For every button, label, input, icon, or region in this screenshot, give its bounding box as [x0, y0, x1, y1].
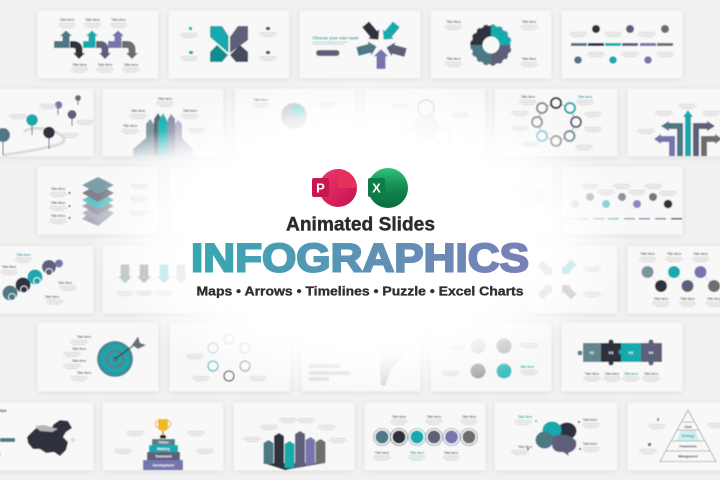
slide: downward arrows card	[103, 246, 223, 313]
slide: stacked layers: Title Here	[51, 201, 65, 205]
slide: swirl chain: Title Here	[45, 295, 59, 299]
slide: zigzag circles: Title Here	[640, 252, 655, 256]
slide: globe: Title Here	[254, 98, 268, 102]
slide: swirl chain: Title Here	[16, 253, 31, 257]
slide: brain: Title Here	[518, 415, 532, 419]
slide: zigzag circles: Title Here	[693, 252, 708, 256]
slide: target: Title Here	[77, 335, 91, 339]
slide: Asia map	[0, 403, 93, 470]
slide: brain: Title Here	[518, 445, 532, 449]
slide: trophy steps: Development	[153, 464, 175, 468]
slide: six circle row: Title Here	[375, 451, 389, 455]
slide: gear: Title Here	[522, 57, 536, 61]
slide: five rising arrows: Title Here	[183, 109, 197, 113]
slide: faint map	[432, 167, 552, 234]
faded converging arrows	[536, 258, 578, 301]
slide: branching arrows	[628, 89, 720, 156]
slide: six circle row: Title Here	[410, 451, 424, 455]
slide: arrow ribbon	[38, 11, 158, 78]
slide: stacked layers	[38, 167, 158, 234]
slide: pyramid: Framework	[679, 444, 697, 448]
slide: faint circle	[170, 167, 290, 234]
icon: PowerPoint logo	[312, 169, 357, 207]
slide: pyramid: Goal	[684, 425, 692, 429]
icon: Excel logo: X	[372, 180, 381, 196]
slide: target: Title Here	[72, 347, 86, 351]
slide: puzzle: Title Here	[644, 372, 658, 376]
slide: pyramid	[628, 403, 720, 470]
slide: six circle row: Title Here	[462, 415, 476, 419]
slide: brain	[495, 403, 617, 470]
slide: puzzle: Title Here	[605, 372, 619, 376]
slide: six circle row: Title Here	[392, 415, 406, 419]
slide: timeline	[562, 11, 682, 78]
slide: puzzle: Title Here	[624, 372, 638, 376]
slide: gear: Title Here	[446, 57, 461, 61]
slide: globe	[235, 89, 355, 156]
slide: ring of eight circles: Title Here	[521, 95, 535, 99]
slide: three circles	[365, 89, 485, 156]
slide: five rising arrows: Title Here	[123, 124, 137, 128]
slide: ring of eight circles: Title Here	[578, 95, 592, 99]
slide: trophy steps: Vision	[158, 440, 169, 444]
slide: six circle row	[365, 403, 485, 470]
slide: puzzle: Title Here	[585, 372, 599, 376]
slide: arrow columns	[234, 403, 354, 470]
slide: trophy steps: Teamwork	[155, 454, 172, 458]
slide: puzzle: 01	[590, 350, 595, 355]
slide: arrow ribbon: Title Here	[111, 18, 126, 22]
subtitle: categories: Maps • Arrows • Timelines • Puzzle • Excel Charts	[196, 284, 524, 298]
slide: arrow ribbon: Title Here	[85, 18, 100, 22]
slide: brain: Title Here	[583, 418, 597, 422]
slide: swirl chain: Title Here	[58, 281, 72, 285]
slide: puzzle: 02	[629, 350, 634, 355]
title: INFOGRAPHICS: INFOGRAPHICS	[191, 236, 529, 280]
slide: target: Title Here	[72, 359, 86, 363]
slide: brain: Title Here	[583, 442, 597, 446]
slide: gear: Title Here	[522, 20, 536, 24]
slide: four circles	[431, 323, 551, 391]
slide: pyramid: Strategy	[682, 434, 695, 438]
slide: arrow ribbon: Title Here	[60, 18, 74, 22]
slide: four circles: Title Here	[520, 365, 534, 369]
slide: seven step timeline	[562, 167, 682, 234]
slide: zigzag circles: Title Here	[680, 297, 695, 301]
slide: target	[38, 323, 158, 391]
slide: five rising arrows: Title Here	[158, 97, 172, 101]
slide: six circle row: Title Here	[427, 415, 441, 419]
slide: zigzag circles: Title Here	[667, 252, 681, 256]
faded downward arrows	[116, 265, 188, 296]
slide: circle cluster	[170, 323, 290, 391]
slide: six circle row: Title Here	[444, 451, 458, 455]
slide: stacked layers: Title Here	[51, 187, 65, 191]
slide: X shape	[169, 11, 289, 78]
slide: swirl chain: Title Here	[2, 265, 16, 269]
icon: PowerPoint logo: P	[316, 180, 325, 196]
slide: arrow ribbon: Title Here	[72, 63, 87, 67]
slide: five rising arrows	[103, 89, 223, 156]
slide: trophy steps: Mastery	[157, 447, 170, 451]
slide: choose your own team	[300, 11, 420, 78]
slide: puzzle: 03	[609, 350, 614, 355]
slide: puzzle: 04	[649, 350, 654, 355]
slide: stacked layers: Title Here	[51, 214, 65, 218]
slide: gear: Title Here	[446, 20, 461, 24]
slide: pyramid: Management	[678, 454, 699, 458]
slide: bars and map	[302, 323, 420, 391]
slide: choose your own team: Choose your own team	[312, 36, 359, 40]
slide: converging arrows card	[528, 246, 617, 313]
slide: arrow ribbon: Title Here	[98, 63, 112, 67]
icon: Excel logo	[368, 168, 408, 208]
slide: road pins	[0, 89, 94, 156]
slide: ring of eight circles	[495, 89, 617, 156]
heading: Animated Slides: Animated Slides	[286, 214, 435, 236]
slide: arrow ribbon: Title Here	[124, 63, 138, 67]
slide: puzzle	[562, 323, 682, 391]
slide: swirl chain	[0, 246, 93, 313]
slide: zigzag circles	[628, 246, 720, 313]
slide: zigzag circles: Title Here	[654, 297, 668, 301]
slide: gear	[431, 11, 551, 78]
slide: trophy steps	[103, 403, 223, 470]
slide: target: Title Here	[77, 371, 91, 375]
slide: five rising arrows: Title Here	[131, 109, 145, 113]
